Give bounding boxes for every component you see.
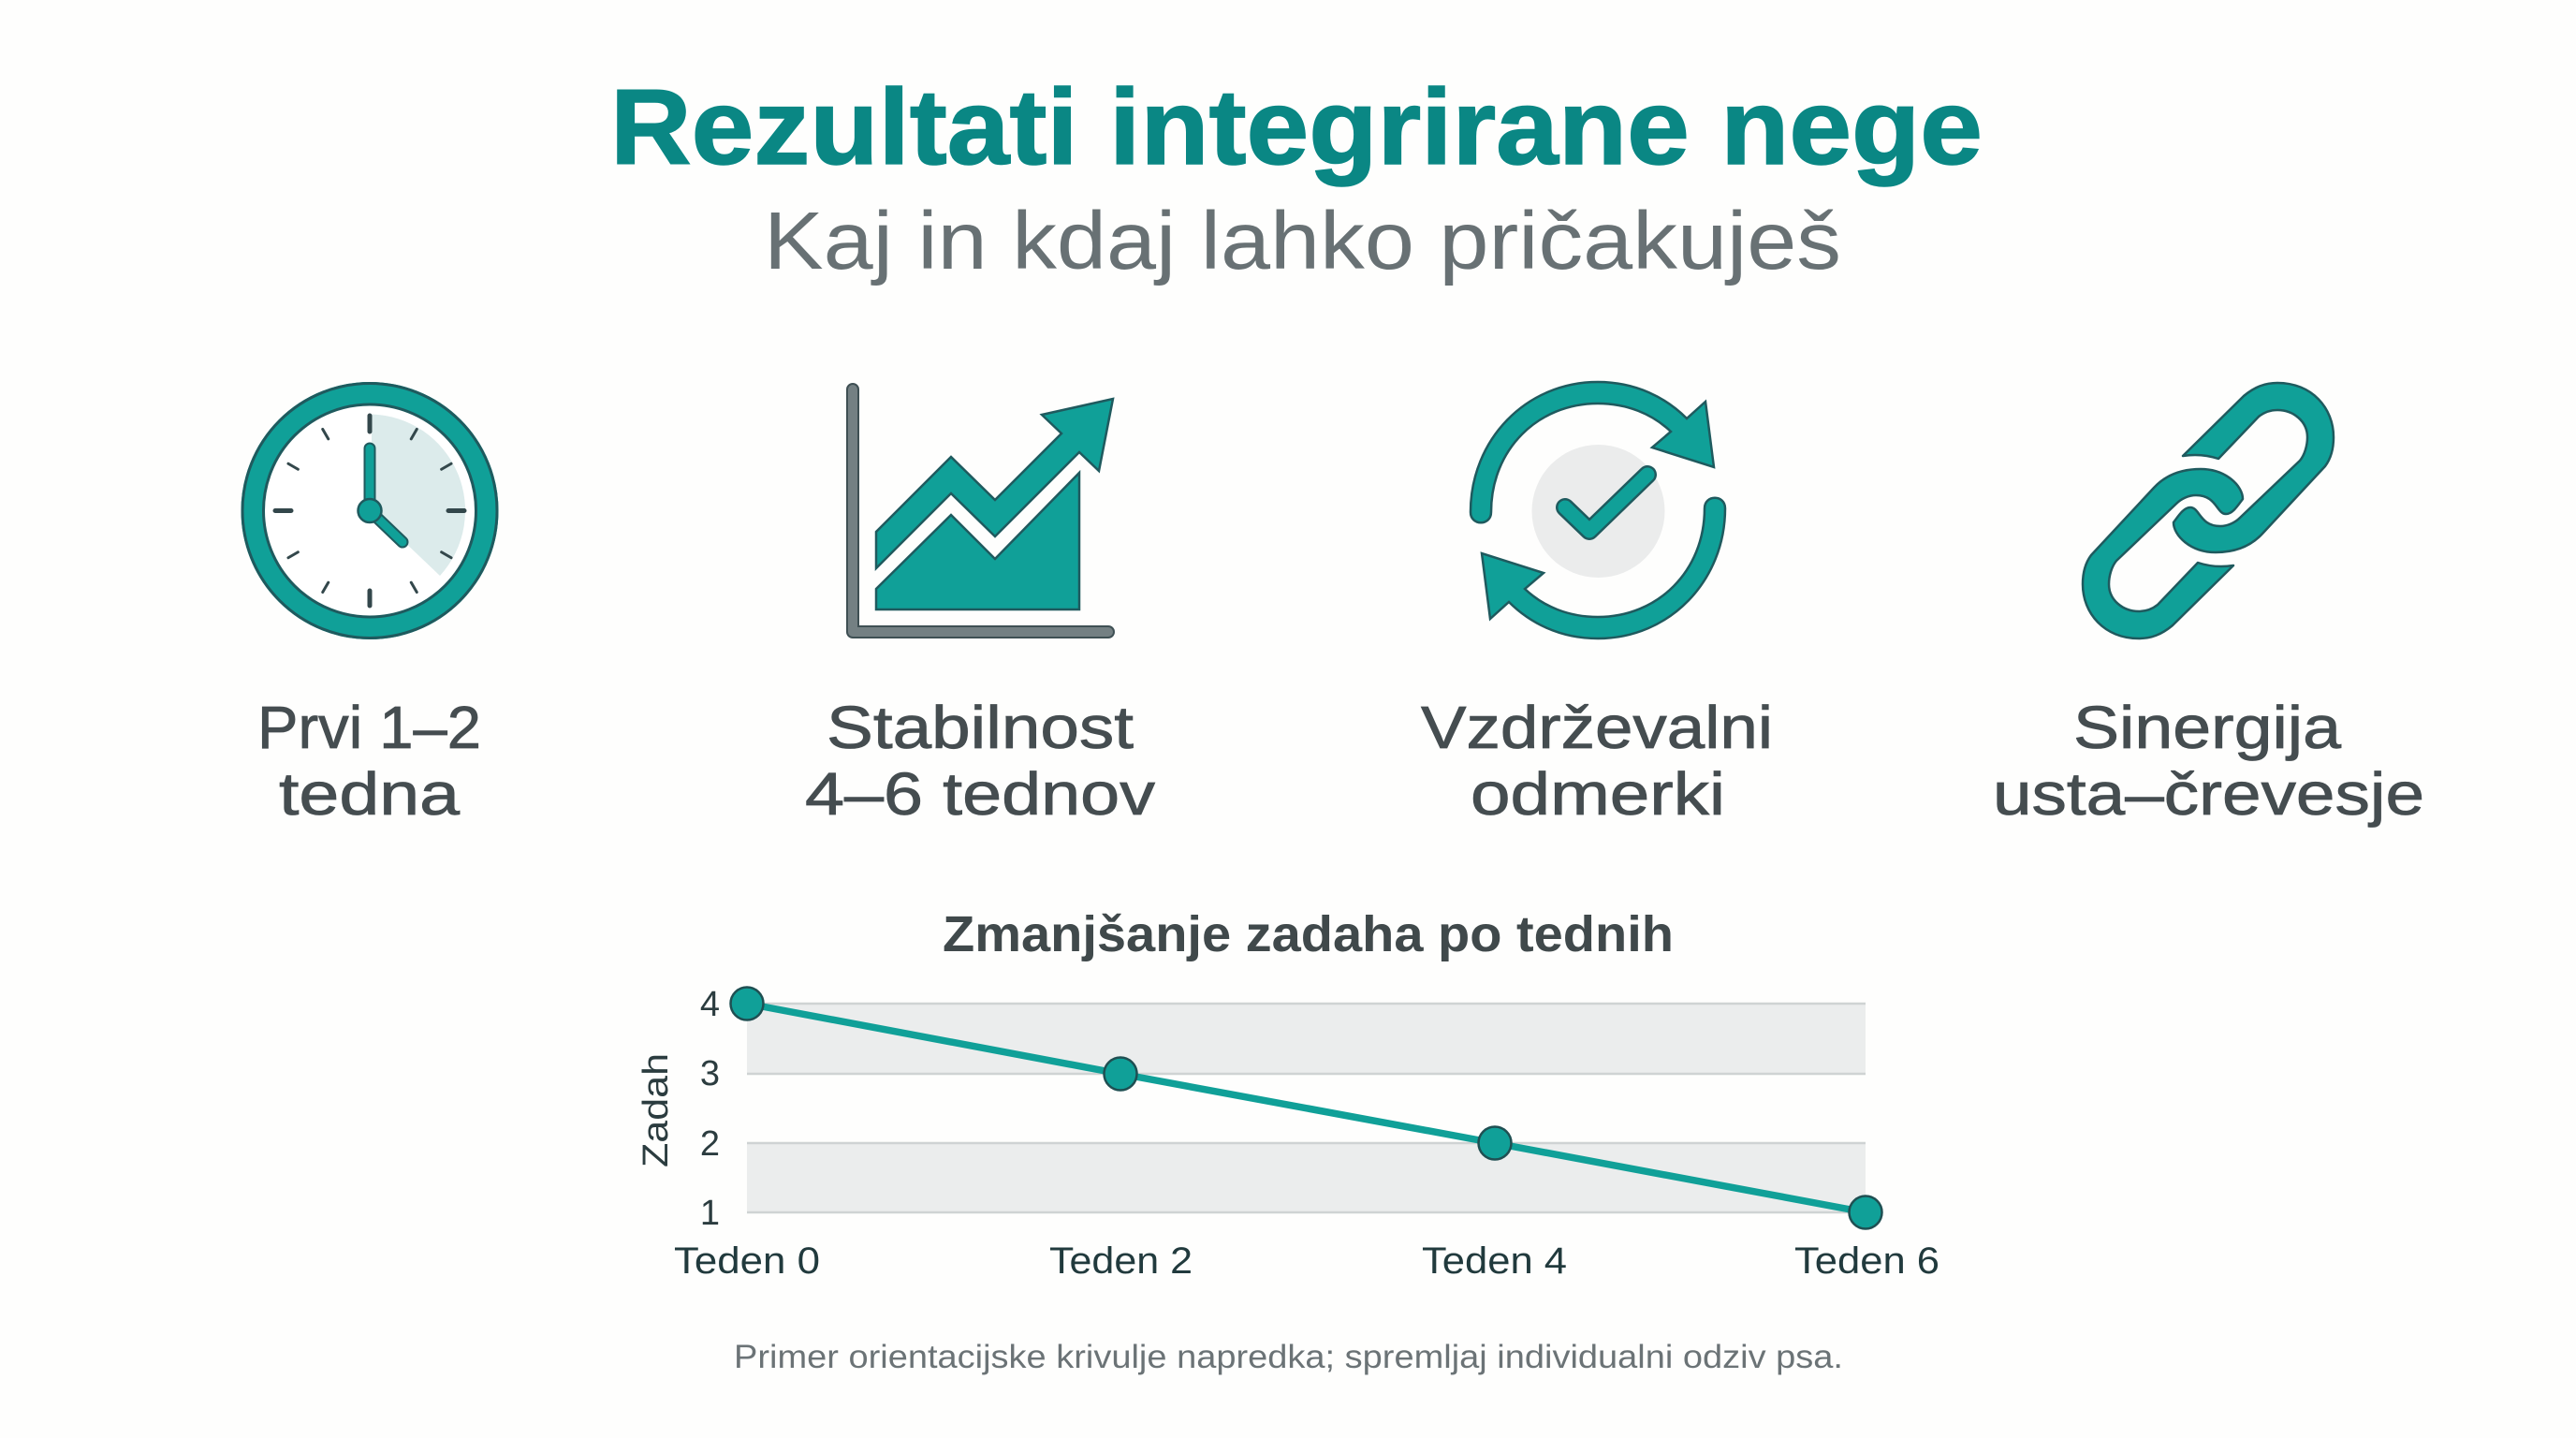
label: first weeks: tedna — [279, 760, 460, 828]
icon: clock — [242, 384, 497, 638]
y axis title: Zadah — [637, 1053, 676, 1167]
label: first weeks: Prvi 1–2 — [257, 694, 481, 761]
x axis labels: Teden 2 — [1049, 1240, 1193, 1282]
x axis labels: Teden 6 — [1794, 1240, 1939, 1282]
y axis labels: 1 — [700, 1194, 720, 1233]
y axis labels: 3 — [700, 1054, 720, 1093]
label: synergy — [1993, 694, 2424, 828]
x axis labels: Teden 4 — [1422, 1240, 1567, 1282]
title: Rezultati integrirane nege — [610, 68, 1983, 187]
y axis labels: 4 — [700, 985, 720, 1024]
line chart: odor reduction — [637, 985, 1939, 1282]
data line — [747, 1004, 1866, 1212]
x axis labels — [674, 1240, 1939, 1282]
data points — [730, 987, 1881, 1228]
label: synergy: usta–črevesje — [1993, 760, 2424, 828]
icon: chain link — [2083, 383, 2334, 638]
icon: renewal cycle with check — [1471, 382, 1725, 638]
footnote: Primer orientacijske krivulje napredka; spremljaj individualni odziv psa. — [734, 1339, 1843, 1375]
x axis labels: Teden 0 — [674, 1240, 820, 1282]
subtitle: Kaj in kdaj lahko pričakuješ — [764, 196, 1841, 286]
label: first weeks — [257, 694, 481, 828]
label: stability: Stabilnost — [827, 694, 1134, 761]
label: maintenance doses: odmerki — [1471, 760, 1725, 828]
label: synergy: Sinergija — [2073, 694, 2341, 761]
label: stability — [805, 694, 1155, 828]
chart title: Zmanjšanje zadaha po tednih — [943, 906, 1674, 962]
y axis labels — [700, 985, 720, 1233]
y axis labels: 2 — [700, 1124, 720, 1164]
icon: growth chart — [853, 389, 1113, 632]
label: maintenance doses: Vzdrževalni — [1421, 694, 1773, 761]
label: stability: 4–6 tednov — [805, 760, 1155, 828]
label: maintenance doses — [1421, 694, 1773, 828]
